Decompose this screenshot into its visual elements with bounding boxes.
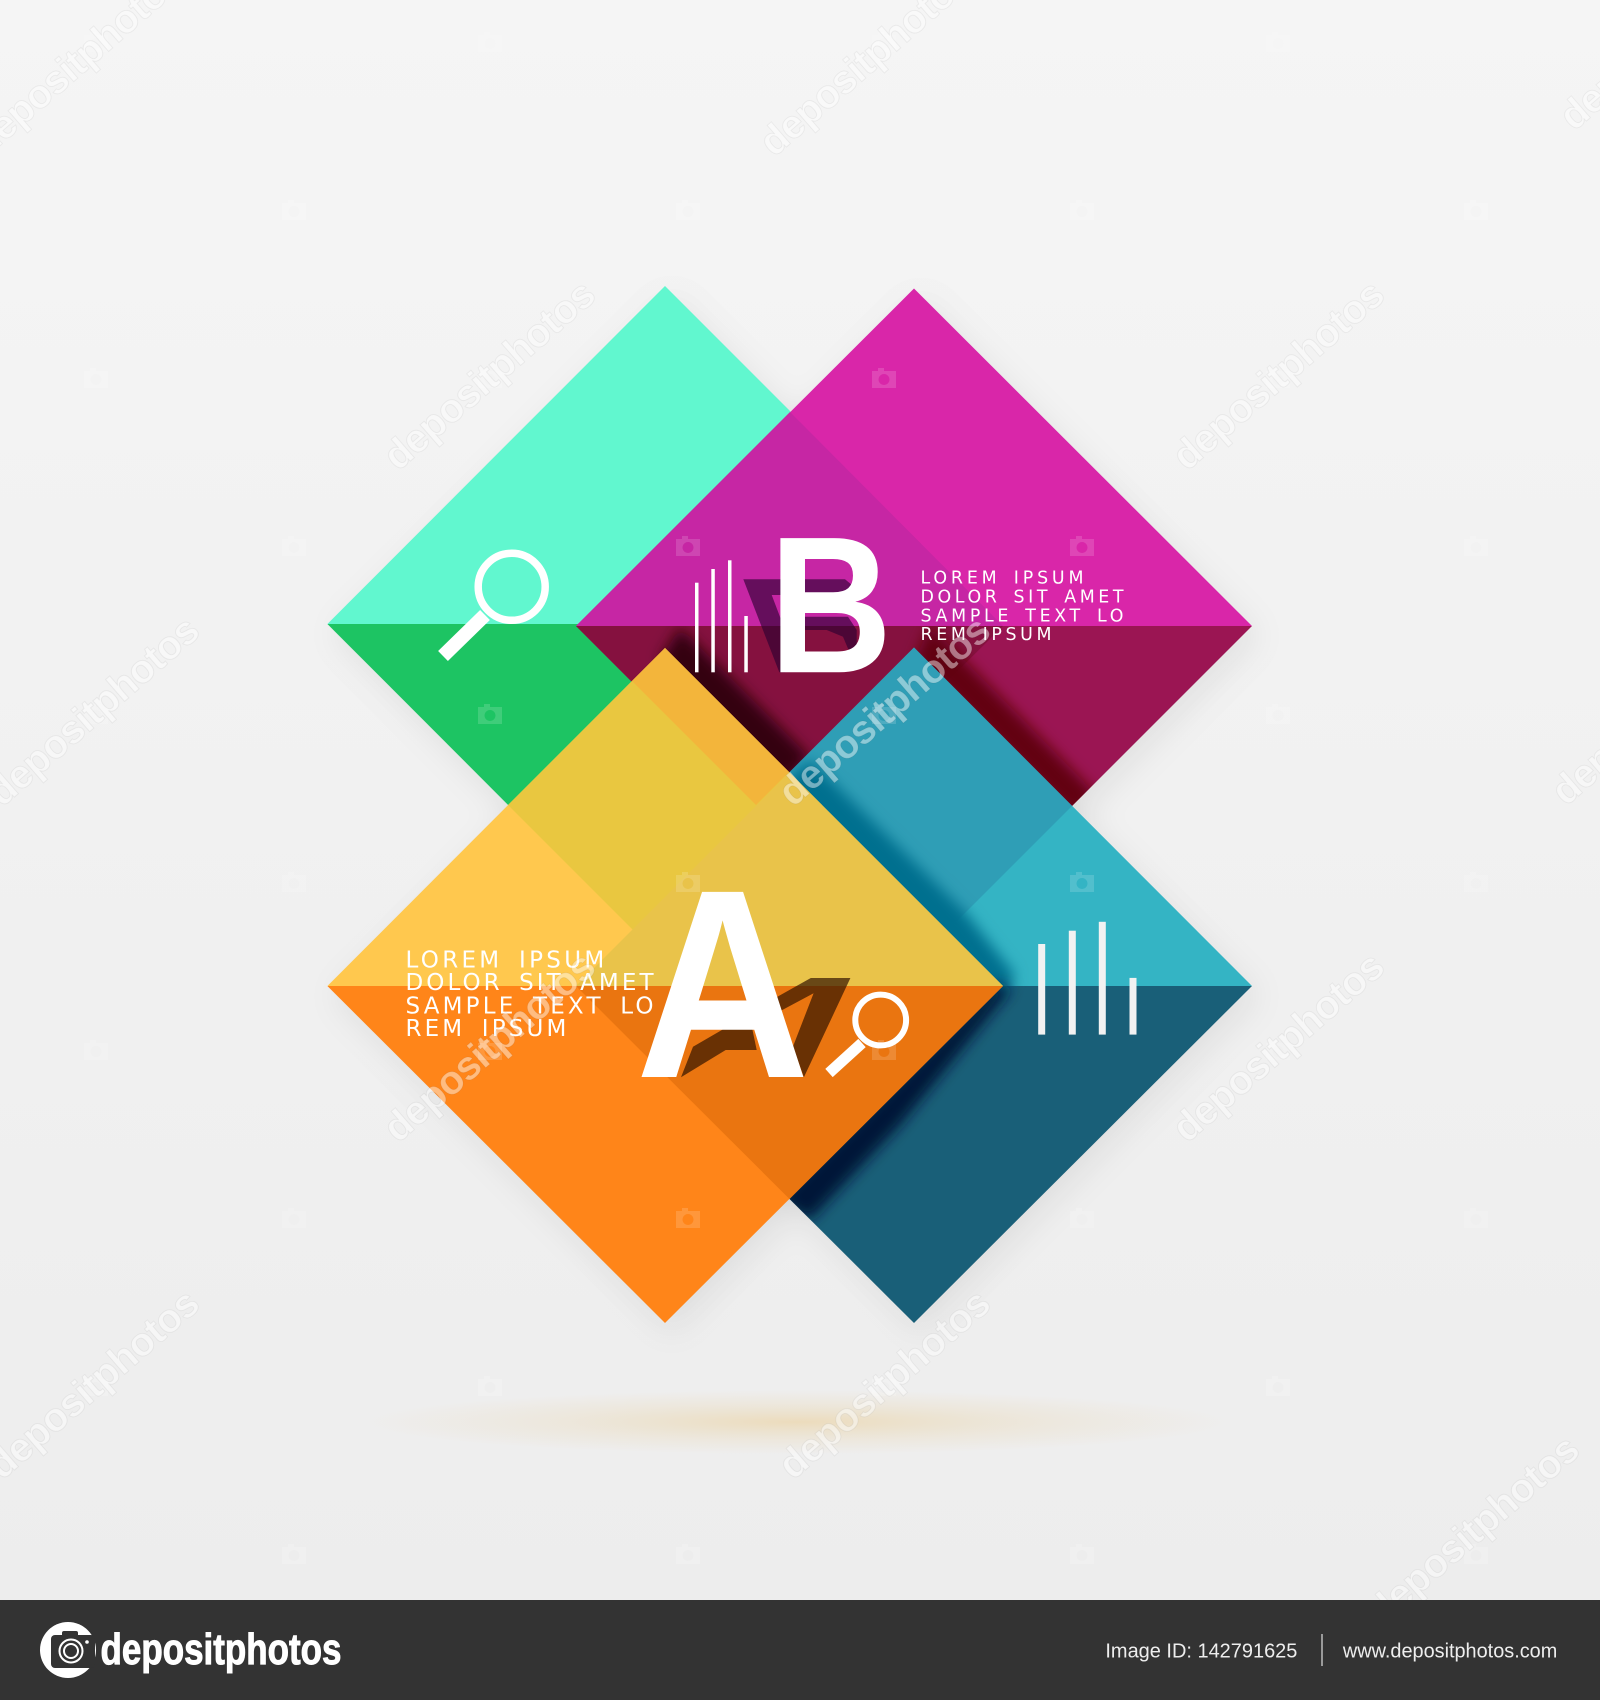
watermark text: depositphotos [770,1281,999,1488]
icon: magnifier on green diamond [443,553,545,656]
text block: orange diamond label: SAMPLE TEXT LO [406,993,654,1019]
footer bar [0,1600,1600,1700]
text block: magenta diamond label [920,568,1124,645]
icon: footer camera logo [40,1622,96,1678]
panel: yellow orange diamond [327,648,1003,1323]
icon: bars on magenta diamond [695,560,748,672]
shadows cast on teal diamond [775,760,1015,1220]
letter A with shadow: A [636,835,810,1135]
text block: magenta diamond label: REM IPSUM [920,625,1052,645]
watermark text: depositphotos [1359,1427,1588,1634]
text block: orange diamond label: DOLOR SIT AMET [406,970,654,996]
footer website: www.depositphotos.com [1342,1639,1557,1662]
watermark text: depositphotos [375,944,604,1151]
footer logo wordmark: depositphotos [100,1625,342,1674]
footer separator [1321,1634,1323,1666]
letter B with shadow: B [769,496,892,714]
text block: orange diamond label: LOREM IPSUM [406,947,604,973]
shadows cast on magenta diamond [660,625,1097,820]
text block: orange diamond label: REM IPSUM [406,1016,566,1042]
text block: orange diamond label [406,947,654,1042]
soft shadows behind diamonds [334,296,1259,1333]
ground shadow [367,1390,1227,1454]
text block: magenta diamond label: DOLOR SIT AMET [920,588,1124,608]
watermark text: depositphotos [1164,272,1393,479]
watermark text: depositphotos [770,608,999,815]
panel: teal diamond [576,648,1252,1323]
panel: magenta diamond [576,288,1252,964]
text block: magenta diamond label: SAMPLE TEXT LO [920,606,1124,626]
watermark text: depositphotos [375,272,604,479]
watermark text: depositphotos [1164,944,1393,1151]
icon: bars on teal diamond [1038,922,1136,1035]
text block: magenta diamond label: LOREM IPSUM [920,568,1084,588]
icon: magnifier on orange diamond [829,995,906,1073]
footer image id: Image ID: 142791625 [1105,1639,1297,1662]
panel: green diamond [327,286,1003,962]
